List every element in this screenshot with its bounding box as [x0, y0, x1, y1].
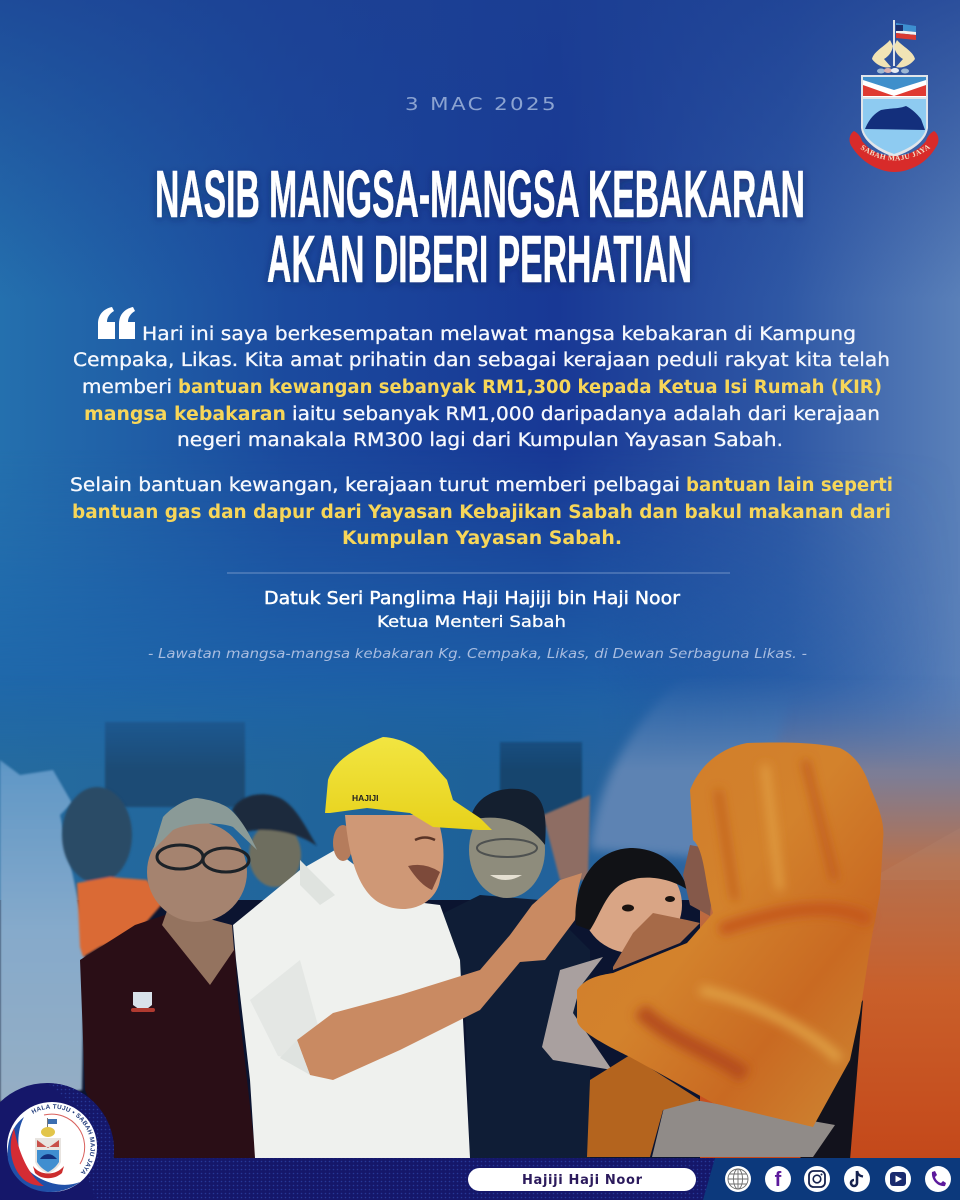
person: man with black cap — [232, 794, 317, 887]
background gradient — [0, 0, 960, 760]
scarf folds — [640, 760, 870, 1075]
dark lower background — [0, 900, 700, 1160]
baby — [542, 848, 700, 1070]
arms holding flag — [872, 40, 915, 68]
icon: facebook — [765, 1166, 791, 1192]
quote paragraph one: memberi — [82, 377, 172, 398]
crest logo top right — [850, 20, 938, 172]
icon: phone — [925, 1166, 951, 1192]
motto ribbon: SABAH MAJU JAYA — [860, 145, 930, 161]
speaker name and role: Ketua Menteri Sabah — [377, 612, 566, 631]
person: man in blue shirt, left — [0, 760, 85, 1102]
person: man smiling behind — [440, 789, 590, 1160]
icon: facebook: f — [775, 1169, 782, 1191]
quote paragraph two: bantuan gas dan dapur dari Yayasan Kebajikan Sabah dan bakul makanan dari — [72, 502, 891, 523]
motto ribbon — [850, 131, 938, 172]
swoosh — [8, 1117, 80, 1192]
name pill: Hajiji Haji Noor — [522, 1173, 643, 1188]
person: man in maroon shirt with grey cap — [80, 798, 257, 1160]
speaker name and role: Datuk Seri Panglima Haji Hajiji bin Haji Noor — [264, 589, 681, 609]
beads — [877, 68, 909, 74]
quote paragraph one: bantuan kewangan sebanyak RM1,300 kepada Ketua Isi Rumah (KIR) — [178, 377, 882, 398]
flag pole and flag — [893, 20, 916, 66]
mini crest — [33, 1118, 64, 1178]
quote paragraph two: bantuan lain seperti — [686, 475, 893, 496]
speaker name and role — [264, 589, 681, 631]
photo background — [0, 670, 960, 1160]
quote paragraph two: Kumpulan Yayasan Sabah. — [342, 528, 622, 549]
quote paragraph one — [73, 324, 890, 451]
woman in orange scarf — [577, 743, 883, 1157]
photo: Chief Minister with fire victims — [0, 670, 960, 1160]
quote paragraph one: iaitu sebanyak RM1,000 daripadanya adalah dari kerajaan — [292, 404, 880, 425]
icon: globe — [725, 1166, 751, 1192]
badge: Hala Tuju Sabah Maju Jaya — [0, 1083, 114, 1198]
icon: tiktok — [844, 1166, 870, 1192]
name pill — [468, 1168, 696, 1191]
person: Chief Minister in white shirt: HAJIJI — [352, 793, 378, 803]
quote paragraph one: mangsa kebakaran — [84, 404, 286, 425]
icon: instagram — [804, 1166, 830, 1192]
small crest on shirt — [131, 992, 155, 1012]
shield — [861, 75, 928, 157]
icon: quotation mark — [98, 307, 135, 339]
quote paragraph two — [70, 475, 893, 549]
quote paragraph two: Selain bantuan kewangan, kerajaan turut memberi pelbagai — [70, 475, 680, 496]
title — [155, 157, 805, 297]
quote paragraph one: Hari ini saya berkesempatan melawat mangsa kebakaran di Kampung — [142, 324, 856, 345]
quote paragraph one: Cempaka, Likas. Kita amat prihatin dan sebagai kerajaan peduli rakyat kita telah — [73, 350, 890, 371]
dark gap beside woman — [800, 1000, 863, 1160]
date: 3 MAC 2025 — [405, 94, 558, 115]
icon: youtube — [885, 1166, 911, 1192]
person: Chief Minister in white shirt — [233, 737, 582, 1158]
red inner arc — [44, 1114, 85, 1164]
footer bar — [0, 1158, 960, 1200]
event caption: - Lawatan mangsa-mangsa kebakaran Kg. Cempaka, Likas, di Dewan Serbaguna Likas. - — [148, 646, 807, 662]
quote paragraph one: negeri manakala RM300 lagi dari Kumpulan Yayasan Sabah. — [177, 430, 783, 451]
ring text: HALA TUJU • SABAH MAJU JAYA — [31, 1104, 95, 1174]
person: man in orange vest — [62, 787, 163, 957]
